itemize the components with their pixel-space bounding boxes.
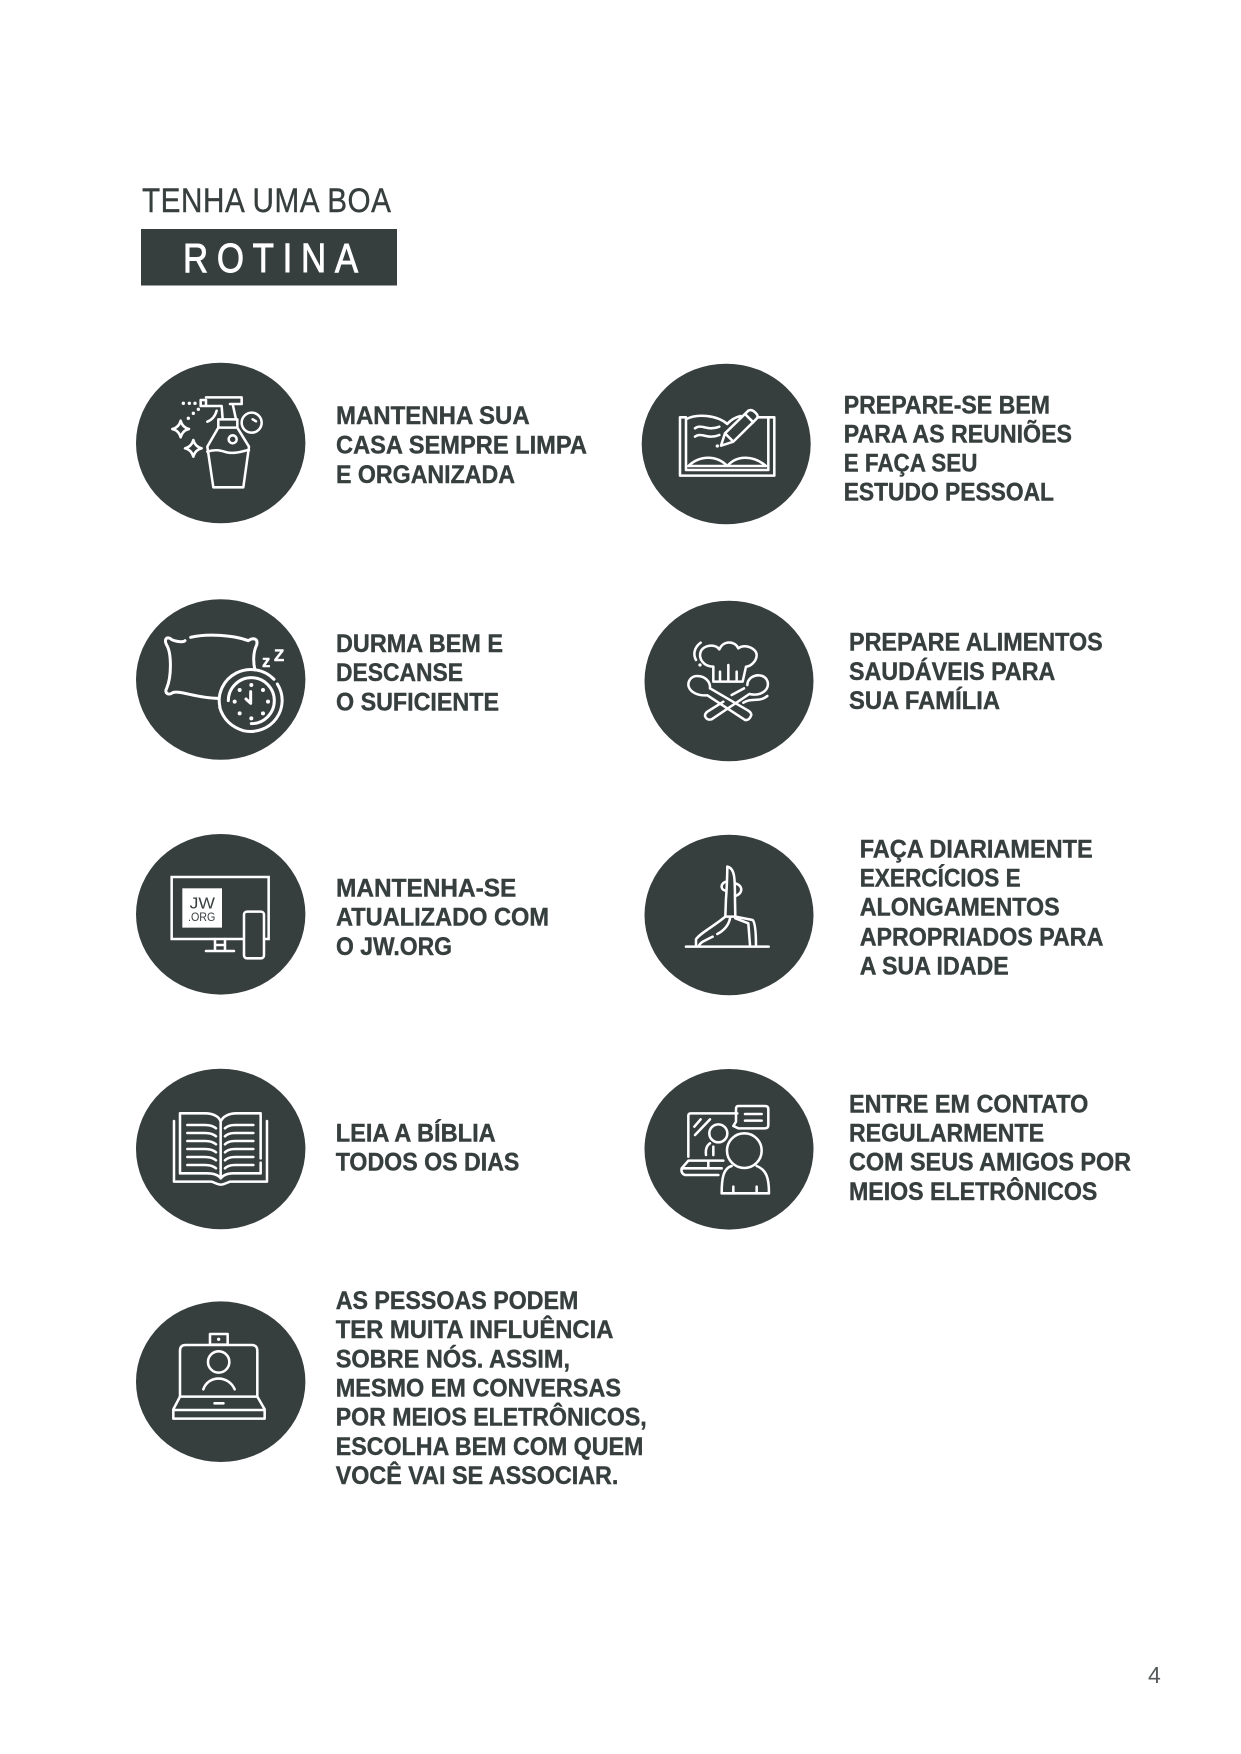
text: entre em contato: COM SEUS AMIGOS POR (849, 1149, 1131, 1177)
item: alimentos (644, 601, 1103, 761)
text: faça diariamente: EXERCÍCIOS E (860, 864, 1021, 893)
text: durma bem: DURMA BEM E (336, 630, 503, 658)
text: as pessoas podem (336, 1287, 647, 1490)
text: prepare-se bem (844, 392, 1072, 507)
title (141, 181, 397, 286)
text: faça diariamente: ALONGAMENTOS (860, 894, 1060, 922)
text: leia a biblia (336, 1119, 519, 1177)
icon: video call person (644, 1069, 814, 1230)
icon: book and pencil (642, 364, 811, 524)
text: prepare alimentos: SAUDÁVEIS PARA (849, 657, 1055, 686)
text: durma bem: O SUFICIENTE (336, 688, 499, 716)
text: mantenha sua casa: CASA SEMPRE LIMPA (336, 432, 587, 460)
text: entre em contato: ENTRE EM CONTATO (849, 1091, 1088, 1119)
text: prepare alimentos: SUA FAMÍLIA (849, 686, 1000, 715)
text: mantenha sua casa (336, 402, 587, 489)
text: leia a biblia: LEIA A BÍBLIA (336, 1119, 496, 1148)
text: leia a biblia: TODOS OS DIAS (336, 1149, 519, 1177)
item: influencia (136, 1287, 647, 1490)
text: durma bem (336, 630, 503, 716)
page number: 4 (1148, 1662, 1161, 1688)
text: entre em contato: MEIOS ELETRÔNICOS (849, 1176, 1097, 1206)
icon: spray bottle (136, 363, 305, 523)
text: as pessoas podem: SOBRE NÓS. ASSIM, (336, 1343, 570, 1373)
text: faça diariamente: FAÇA DIARIAMENTE (860, 836, 1093, 864)
item: biblia (136, 1069, 519, 1229)
title banner: rotina: ROTINA (183, 236, 359, 282)
icon: yoga pose (644, 835, 814, 995)
item: sono (136, 599, 503, 760)
text: as pessoas podem: VOCÊ VAI SE ASSOCIAR. (336, 1460, 618, 1490)
text: prepare-se bem: PARA AS REUNIÕES (844, 419, 1072, 449)
text: entre em contato (849, 1091, 1131, 1206)
text: mantenha-se atualizado: ATUALIZADO COM (336, 904, 549, 932)
icon: open bible (136, 1069, 305, 1229)
text: faça diariamente: APROPRIADOS PARA (860, 923, 1103, 951)
icon: pillow and clock: Z (274, 646, 284, 665)
text: mantenha-se atualizado (336, 875, 549, 961)
icon: monitor and phone: .ORG (188, 911, 215, 924)
item: exercicios (644, 835, 1103, 995)
icon: pillow and clock (136, 599, 305, 760)
item: contato com amigos (644, 1069, 1131, 1230)
text: as pessoas podem: ESCOLHA BEM COM QUEM (336, 1433, 643, 1461)
text: faça diariamente: A SUA IDADE (860, 953, 1009, 981)
text: mantenha sua casa: MANTENHA SUA (336, 402, 530, 430)
icon: monitor and phone (136, 834, 305, 995)
item: jw.org (136, 834, 549, 995)
text: as pessoas podem: TER MUITA INFLUÊNCIA (336, 1314, 613, 1344)
text: as pessoas podem: MESMO EM CONVERSAS (336, 1375, 621, 1403)
title line: tenha uma boa: TENHA UMA BOA (142, 181, 391, 220)
text: mantenha sua casa: E ORGANIZADA (336, 461, 515, 489)
icon: chef hat and spoons (644, 601, 814, 761)
text: prepare-se bem: E FAÇA SEU (844, 450, 977, 478)
text: durma bem: DESCANSE (336, 659, 463, 687)
text: as pessoas podem: POR MEIOS ELETRÔNICOS, (336, 1402, 647, 1432)
text: faça diariamente (860, 836, 1103, 981)
text: prepare alimentos: PREPARE ALIMENTOS (849, 629, 1103, 657)
icon: laptop with person (136, 1301, 305, 1462)
text: prepare-se bem: PREPARE-SE BEM (844, 392, 1050, 420)
title banner: rotina (141, 229, 397, 286)
text: mantenha-se atualizado: MANTENHA-SE (336, 875, 516, 903)
item: limpeza (136, 363, 587, 523)
icon: monitor and phone: JW (190, 895, 216, 912)
text: entre em contato: REGULARMENTE (849, 1120, 1044, 1148)
text: as pessoas podem: AS PESSOAS PODEM (336, 1287, 578, 1315)
item: estudo (642, 364, 1072, 524)
icon: pillow and clock: z (262, 652, 270, 671)
text: prepare alimentos (849, 629, 1103, 715)
text: prepare-se bem: ESTUDO PESSOAL (844, 479, 1054, 507)
text: mantenha-se atualizado: O JW.ORG (336, 933, 452, 961)
